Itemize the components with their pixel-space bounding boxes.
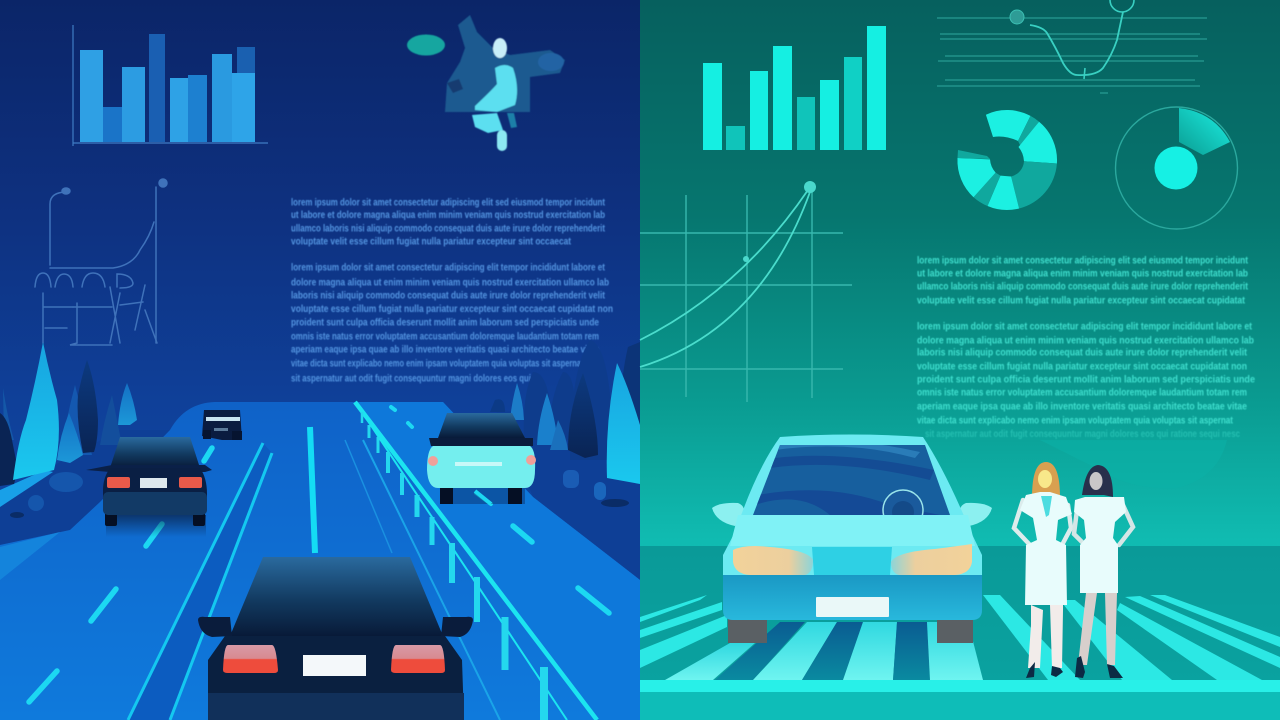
- text block: upper blue paragraph: lorem ipsum dolor sit amet consectetur adipiscing elit sed eiusmod tempor incidunt: [291, 196, 605, 208]
- text block: upper blue paragraph: ut labore et dolore magna aliqua enim minim veniam quis nostrud exercitation lab: [291, 209, 605, 221]
- text block: lower blue paragraph: dolore magna aliqua ut enim minim veniam quis nostrud exercitation ullamco lab: [291, 276, 609, 288]
- text block: lower blue paragraph: [291, 262, 613, 384]
- bar chart: teal: [703, 26, 886, 150]
- panel: left blue highway scene: [0, 0, 640, 720]
- car: foreground dark: [198, 557, 473, 720]
- panel: right teal scene: [640, 0, 1280, 720]
- road markings: [29, 407, 609, 720]
- road surface: [0, 402, 640, 720]
- car: left mid dark: [86, 437, 212, 537]
- ground: forest verges: [0, 408, 640, 580]
- scenery: distant hill: [1040, 440, 1227, 488]
- text block: upper teal paragraph: [917, 254, 1248, 306]
- car: right cyan: [427, 413, 536, 504]
- text block: lower blue paragraph: voluptate esse cillum fugiat nulla pariatur excepteur sint occaecat cupidatat non: [291, 303, 613, 315]
- text block: lower blue paragraph: vitae dicta sunt explicabo nemo enim ipsam voluptatem quia voluptas sit aspernatur: [291, 358, 591, 370]
- text block: lower teal paragraph: [917, 320, 1255, 440]
- donut chart: ring with wedge: [1116, 107, 1238, 229]
- text block: lower blue paragraph: omnis iste natus error voluptatem accusantium doloremque laudantium totam rem: [291, 330, 599, 342]
- text block: lower blue paragraph: laboris nisi aliquip commodo consequat duis aute irure dolor reprehenderit velit: [291, 290, 605, 302]
- figure: woman with dark hair: [1074, 465, 1133, 678]
- guard rail: [355, 402, 597, 720]
- text block: upper blue paragraph: [291, 196, 605, 248]
- text block: lower blue paragraph: lorem ipsum dolor sit amet consectetur adipiscing elit tempor incididunt labore et: [291, 262, 605, 274]
- line chart: growth curves: [640, 181, 852, 402]
- trees: left forest: [0, 342, 137, 518]
- line chart: stethoscope curve: [937, 0, 1207, 93]
- icon: abstract puzzle figure: [407, 15, 565, 151]
- text block: lower blue paragraph: aperiam eaque ipsa quae ab illo inventore veritatis quasi architecto beatae vitae: [291, 344, 599, 356]
- text block: lower blue paragraph: sit aspernatur aut odit fugit consequuntur magni dolores eos qui: [291, 372, 531, 384]
- text block: lower blue paragraph: proident sunt culpa officia deserunt mollit anim laborum sed perspiciatis unde: [291, 316, 599, 328]
- ground with crosswalk: [640, 546, 1280, 720]
- icon: sketched line figures: [35, 179, 167, 345]
- trees: right forest: [490, 340, 640, 507]
- figure: woman with blonde hair: [1014, 462, 1072, 678]
- car: far dark: [202, 410, 242, 440]
- text block: upper blue paragraph: voluptate velit esse cillum fugiat nulla pariatur excepteur sint occaecat: [291, 236, 571, 248]
- bar chart: blue: [73, 25, 268, 146]
- donut chart: segmented: [957, 110, 1057, 210]
- text block: upper blue paragraph: ullamco laboris nisi aliquip commodo consequat duis aute irure dolor reprehenderit: [291, 222, 605, 234]
- car: teal front view: [712, 434, 992, 643]
